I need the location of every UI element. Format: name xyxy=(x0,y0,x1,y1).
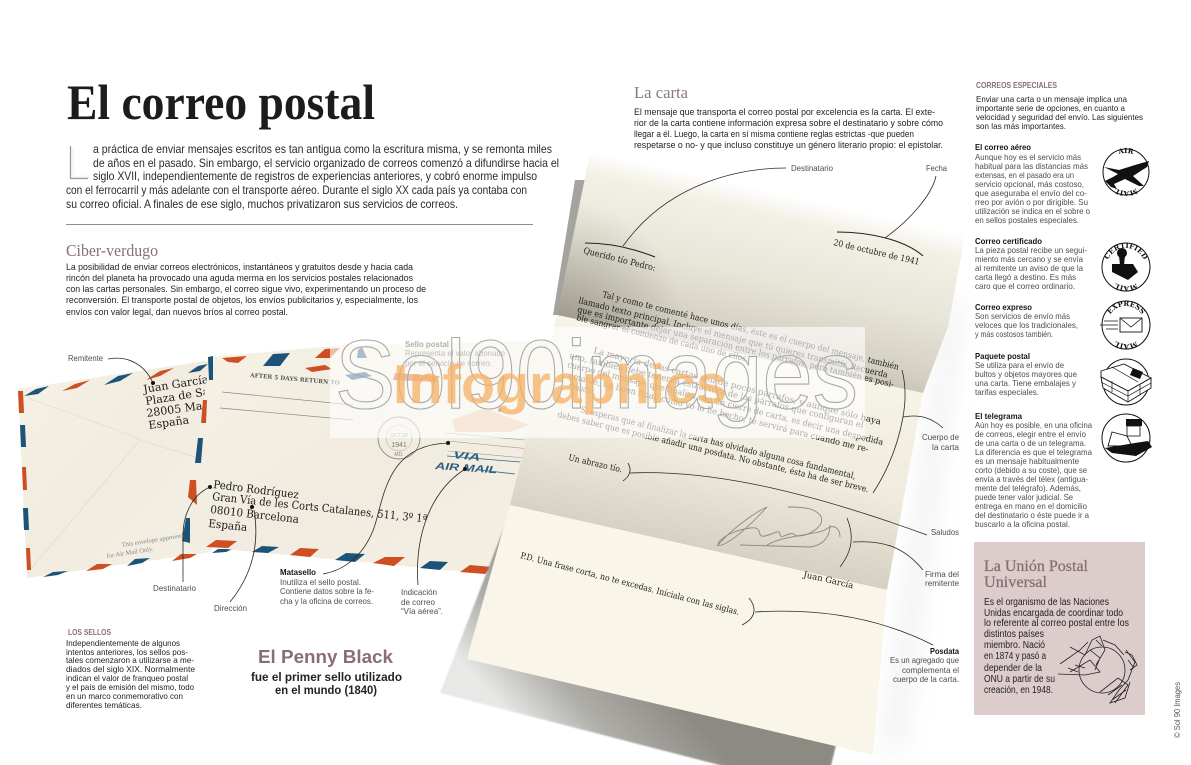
letter paper xyxy=(467,153,965,755)
text: paquete postal: una carta. Tiene embalajes y xyxy=(975,378,1077,388)
text: el correo aereo: Aunque hoy es el servicio más xyxy=(975,152,1081,162)
callout: direccion: Dirección xyxy=(214,603,247,613)
letter shadows xyxy=(440,180,965,765)
text: correo certificado: Correo certificado xyxy=(975,236,1042,246)
envelope: back: This envelope approved xyxy=(121,532,185,549)
section: correos especiales intro xyxy=(976,80,1143,131)
text: el correo aereo: utilización se indica en el sobre o xyxy=(975,206,1090,216)
text: el telegrama: buscarlo a la oficina postal. xyxy=(975,519,1070,529)
callout: destinatario (letter): Destinatario xyxy=(791,163,833,173)
icon: express stamp: EXPRESS xyxy=(1107,300,1145,314)
heading: penny black xyxy=(251,647,402,697)
stamp and air mail mark xyxy=(433,408,530,476)
icon: express stamp xyxy=(1100,300,1150,350)
letter text: spondas. xyxy=(567,381,597,398)
text: el correo aereo: que aseguraba el envío del co- xyxy=(975,188,1087,198)
stamp and air mail mark: AIR MAIL xyxy=(433,461,497,476)
text: el telegrama: La diferencia es que el telegrama xyxy=(975,447,1092,457)
callout: destinatario (envelope): Destinatario xyxy=(153,583,196,593)
text: correo expreso: y más costosos también. xyxy=(975,329,1053,339)
stamp and air mail mark: VIA xyxy=(453,450,481,464)
callout: firma del remitente: Firma del xyxy=(925,569,959,579)
section: correos especiales intro: velocidad y seguridad del envío. Las siguientes xyxy=(976,112,1143,122)
sello postal label: Sello postal xyxy=(405,339,449,349)
callout: via aerea: “Vía aérea”. xyxy=(401,606,443,616)
callout: matasello: Inutiliza el sello postal. xyxy=(280,577,361,587)
intro text block: siglo XVII, independientemente de registros de experiencias anteriores, y cobró enorme impulso xyxy=(93,170,537,183)
watermark: Infographics xyxy=(393,353,727,415)
text: el telegrama: del destinatario o éste puede ir a xyxy=(975,510,1089,520)
panel: La Union Postal Universal: distintos países xyxy=(984,629,1044,640)
text: el telegrama: corto (debido a su coste), que se xyxy=(975,465,1087,475)
section: Ciber-verdugo: rincón del planeta ha provocado una aguda merma en los servicios postales relacionados xyxy=(66,273,413,283)
icon: parcel xyxy=(1101,359,1151,405)
text: el telegrama: de correos, elegir entre el envío xyxy=(975,429,1086,439)
section: los sellos xyxy=(66,627,195,710)
letter text: debes saber que es posible añadir una posdata. No obstante, ésta ha de ser breve. xyxy=(556,409,870,495)
recipient address xyxy=(208,478,428,534)
intro text block: su correo oficial. A finales de ese siglo, muchos privatizaron sus servicios de correos. xyxy=(66,198,458,211)
sender address: 28005 Madrid xyxy=(146,396,226,420)
text: correo certificado: carta llegó a destino. Es más xyxy=(975,272,1076,282)
letter text: P.D. Una frase corta, no te excedas. Iníciala con las siglas. xyxy=(519,550,741,618)
letter text: Un abrazo tío. xyxy=(567,452,623,475)
callout: posdata: cuerpo de la carta. xyxy=(893,674,959,684)
callout: via aerea: de correo xyxy=(401,597,435,607)
recipient address: Pedro Rodríguez xyxy=(213,478,300,501)
section: Ciber-verdugo xyxy=(66,241,426,317)
icon: express stamp: MAIL xyxy=(1115,341,1137,348)
text: correo expreso xyxy=(975,302,1078,339)
icon: certified stamp: MAIL xyxy=(1115,283,1137,290)
sender address: España xyxy=(148,413,190,432)
icon: certified stamp xyxy=(1102,242,1150,292)
text: el telegrama: El telegrama xyxy=(975,411,1022,421)
callout: matasello xyxy=(280,441,450,606)
panel: La Union Postal Universal: ONU a partir de su xyxy=(984,674,1055,685)
icon: UPU monument xyxy=(1058,636,1137,703)
letter text: que es importante dejar una separación entre los párrafos, pero también es posi- xyxy=(576,304,895,390)
panel: La Union Postal Universal: Es el organismo de las Naciones xyxy=(984,597,1109,608)
section: los sellos: y el país de emisión del mismo, todo xyxy=(66,682,194,692)
letter text: 20 de octubre de 1941 xyxy=(832,238,920,268)
heading: penny black: en el mundo (1840) xyxy=(275,685,377,697)
watermark: Sol90images xyxy=(335,320,858,429)
panel: La Union Postal Universal: Unidas encargada de coordinar todo xyxy=(984,608,1123,619)
callout: destinatario (letter) xyxy=(585,163,833,257)
callout: posdata: complementa el xyxy=(902,665,959,675)
postmark: 1941 xyxy=(391,442,407,449)
letter text: uno, también debe tener la estructura de los párrafos que configuran el xyxy=(568,350,865,431)
text: correo certificado: miento más cercano y se envía xyxy=(975,254,1083,264)
section: los sellos: diferentes temáticas. xyxy=(66,700,142,710)
section: La carta: llegar a él. Luego, la carta en sí misma contiene reglas estrictas -que pueden xyxy=(634,129,914,139)
sello postal label: Representa el valor abonado xyxy=(405,348,505,358)
letter text: llamado texto principal. Incluye el mensaje que tú quieres transmitir. Recuerda xyxy=(577,295,889,381)
text: el correo aereo: servicio opcional, más costoso, xyxy=(975,179,1084,189)
letter text: Tal y como te comenté hace unos días, éste es el cuerpo del mensaje, también xyxy=(601,289,900,373)
section: los sellos: diados del siglo XIX. Normalmente xyxy=(66,664,195,674)
callout: saludos: Saludos xyxy=(931,527,959,537)
envelope: back: for Air Mail Only. xyxy=(106,546,154,560)
callout: via aerea xyxy=(401,467,467,616)
sender address: Plaza de San xyxy=(144,384,217,408)
intro text block: a práctica de enviar mensajes escritos es tan antigua como la escritura misma, y se remonta miles xyxy=(93,143,552,156)
text: el telegrama: envía a través del télex (antigua- xyxy=(975,474,1088,484)
callout: via aerea: Indicación xyxy=(401,587,437,597)
postmark xyxy=(378,417,420,459)
sender address xyxy=(141,373,226,432)
callout: posdata: Posdata xyxy=(930,646,959,656)
callout: cuerpo de la carta: Cuerpo de xyxy=(922,432,959,442)
letter text: La mayoría de las cartas son de pocos párrafos, y aunque sólo haya xyxy=(592,345,882,428)
callout: firma del remitente: remitente xyxy=(925,578,959,588)
letter text xyxy=(519,238,920,618)
letter text: Querido tío Pedro: xyxy=(582,245,657,274)
heading: penny black: fue el primer sello utilizado xyxy=(251,672,402,684)
callout: matasello: cha y la oficina de correos. xyxy=(280,596,373,606)
section: Ciber-verdugo: La posibilidad de enviar correos electrónicos, instantáneos y gratuitos desde y hacia cada xyxy=(66,262,414,272)
recipient address: Gran Vía de les Corts Catalanes, 511, 3º 1ª xyxy=(212,490,428,526)
text: el telegrama: Aún hoy es posible, en una oficina xyxy=(975,420,1092,430)
text: el correo aereo: rreo por avión o por dirigible. Su xyxy=(975,197,1088,207)
section: correos especiales intro: CORREOS ESPECIALES xyxy=(976,80,1057,90)
callout: matasello: Contiene datos sobre la fe- xyxy=(280,586,374,596)
text: paquete postal xyxy=(975,351,1077,397)
panel: La Union Postal Universal: depender de la xyxy=(984,663,1042,674)
callout: fecha: Fecha xyxy=(926,163,947,173)
intro text block: de años en el pasado. Sin embargo, el servicio organizado de correos comenzó a difundirse hacia el xyxy=(93,157,559,170)
title: El correo postal xyxy=(67,74,375,130)
text: el telegrama: mente del telégrafo). Además, xyxy=(975,483,1081,493)
section: los sellos: LOS SELLOS xyxy=(68,627,111,637)
icon: telegraph machine xyxy=(1102,414,1152,462)
letter text: cuerpo del mensaje, que finaliza con un cierre de carta, es decir una despedida xyxy=(566,360,884,448)
callout: posdata: Es un agregado que xyxy=(890,655,959,665)
panel: La Union Postal Universal xyxy=(974,542,1145,715)
envelope: front: AFTER 5 DAYS RETURN TO xyxy=(249,373,340,387)
heading: penny black: El Penny Black xyxy=(258,647,394,667)
text: el correo aereo: extensas, en el pasado era un xyxy=(975,170,1074,180)
text: el correo aereo: habitual para las distancias más xyxy=(975,161,1088,171)
text: correo certificado xyxy=(975,236,1087,291)
callout: cuerpo de la carta xyxy=(873,370,959,493)
text: correo certificado: al remitente un aviso de que la xyxy=(975,263,1083,273)
sello postal label: por el servicio de correo. xyxy=(405,358,492,368)
sender address: Juan García xyxy=(141,373,210,396)
section: Ciber-verdugo: con las cartas personales. Sin embargo, el correo sigue vivo, experimentando un proceso de xyxy=(66,284,426,294)
section: los sellos: Independientemente de algunos xyxy=(66,638,180,648)
intro text block xyxy=(66,137,559,211)
text: el telegrama: puede tener valor judicial. Se xyxy=(975,492,1073,502)
text: paquete postal: tarifas especiales. xyxy=(975,387,1039,397)
section: correos especiales intro: Enviar una carta o un mensaje implica una xyxy=(976,94,1127,104)
section: los sellos: tales comenzaron a utilizarse a me- xyxy=(66,655,194,665)
section: Ciber-verdugo: envíos con valor legal, dan nuevos bríos al correo postal. xyxy=(66,307,288,317)
text: el correo aereo xyxy=(975,142,1090,225)
section: correos especiales intro: son las más importantes. xyxy=(976,121,1066,131)
callout: cuerpo de la carta: la carta xyxy=(932,442,959,452)
text: el telegrama: de una carta o de un telegrama. xyxy=(975,438,1086,448)
panel: La Union Postal Universal: en 1874 y pasó a xyxy=(984,651,1046,662)
intro text block: con el ferrocarril y más adelante con el transporte aéreo. Durante el siglo XX cada país ya contaba con xyxy=(66,184,527,197)
panel: La Union Postal Universal: lo referente al correo postal entre los xyxy=(984,618,1129,629)
panel: La Union Postal Universal: miembro. Nació xyxy=(984,640,1045,651)
recipient address: 08010 Barcelona xyxy=(210,503,300,526)
panel: La Union Postal Universal: La Unión Postal xyxy=(984,558,1089,575)
credit: © Sol 90 Images xyxy=(1173,682,1182,738)
text: paquete postal: Se utiliza para el envío de xyxy=(975,360,1064,370)
text: correo certificado: caro que el correo ordinario. xyxy=(975,281,1075,291)
section: Ciber-verdugo: reconversión. El transporte postal de objetos, los envíos publicitarios y, especialmente, los xyxy=(66,295,418,305)
section: La carta xyxy=(634,83,943,150)
icon: air mail stamp: MAIL xyxy=(1115,188,1138,196)
letter text: ble sangrar el comienzo de cada uno de ellos. xyxy=(575,313,750,365)
text: paquete postal: bultos y objetos mayores que xyxy=(975,369,1077,379)
callout: remitente: Remitente xyxy=(68,353,103,363)
letter text: Si esperas que al finalizar la carta has olvidado alguna cosa fundamental, xyxy=(579,405,857,482)
callout: direccion xyxy=(214,505,256,613)
panel: La Union Postal Universal: creación, en 1948. xyxy=(984,685,1053,696)
sello postal label xyxy=(405,339,505,412)
section: La carta: La carta xyxy=(634,83,688,102)
text: correo expreso: Son servicios de envío más xyxy=(975,311,1070,321)
recipient address: España xyxy=(208,517,248,534)
callout: firma del remitente xyxy=(840,518,959,588)
callout: saludos xyxy=(623,463,959,537)
text: correo expreso: Correo expreso xyxy=(975,302,1032,312)
envelope: back xyxy=(18,360,233,578)
section: La carta: El mensaje que transporta el correo postal por excelencia es la carta. El exte- xyxy=(634,107,935,117)
letter text: amable, un buen final, como yo lo he hecho, te servirá para cuando me re- xyxy=(567,370,870,455)
text: el telegrama xyxy=(975,411,1092,529)
panel: La Union Postal Universal: Universal xyxy=(984,574,1048,591)
section: los sellos: en un marco conmemorativo con xyxy=(66,691,183,701)
postmark: MD. xyxy=(394,452,404,458)
text: el telegrama: es un mensaje habitualmente xyxy=(975,456,1079,466)
section: correos especiales intro: importante serie de opciones, en cuanto a xyxy=(976,103,1125,113)
text: el telegrama: entrega en mano en el domicilio xyxy=(975,501,1087,511)
text: correo expreso: veloces que los tradicionales, xyxy=(975,320,1078,330)
signature xyxy=(717,507,840,547)
icon: air mail stamp: AIR xyxy=(1118,148,1134,154)
section: La carta: rior de la carta contiene información expresa sobre el destinatario y sobre cómo xyxy=(634,118,943,128)
text: correo certificado: La pieza postal recibe un segui- xyxy=(975,245,1087,255)
callout: destinatario (envelope) xyxy=(153,485,212,593)
callout: remitente xyxy=(68,353,155,385)
section: La carta: respetarse o no- y que incluso constituye un género literario propio: el epistolar. xyxy=(634,140,943,150)
text: el correo aereo: El correo aéreo xyxy=(975,142,1031,152)
letter text: Juan García xyxy=(801,569,854,591)
icon: air mail stamp xyxy=(1102,148,1150,196)
postmark: OCT 20 xyxy=(390,433,408,439)
callout: posdata xyxy=(742,598,959,684)
text: el correo aereo: en sellos postales especiales. xyxy=(975,215,1079,225)
section: Ciber-verdugo: Ciber-verdugo xyxy=(66,241,158,260)
envelope: front xyxy=(182,340,590,584)
callout: fecha xyxy=(837,163,947,256)
icon: certified stamp: CERTIFIED xyxy=(1104,242,1148,259)
intro text block: L xyxy=(66,137,92,189)
section: los sellos: intentos anteriores, los sellos pos- xyxy=(66,647,188,657)
text: paquete postal: Paquete postal xyxy=(975,351,1030,361)
callout: matasello: Matasello xyxy=(280,567,316,577)
section: los sellos: indican el valor de franqueo postal xyxy=(66,673,188,683)
